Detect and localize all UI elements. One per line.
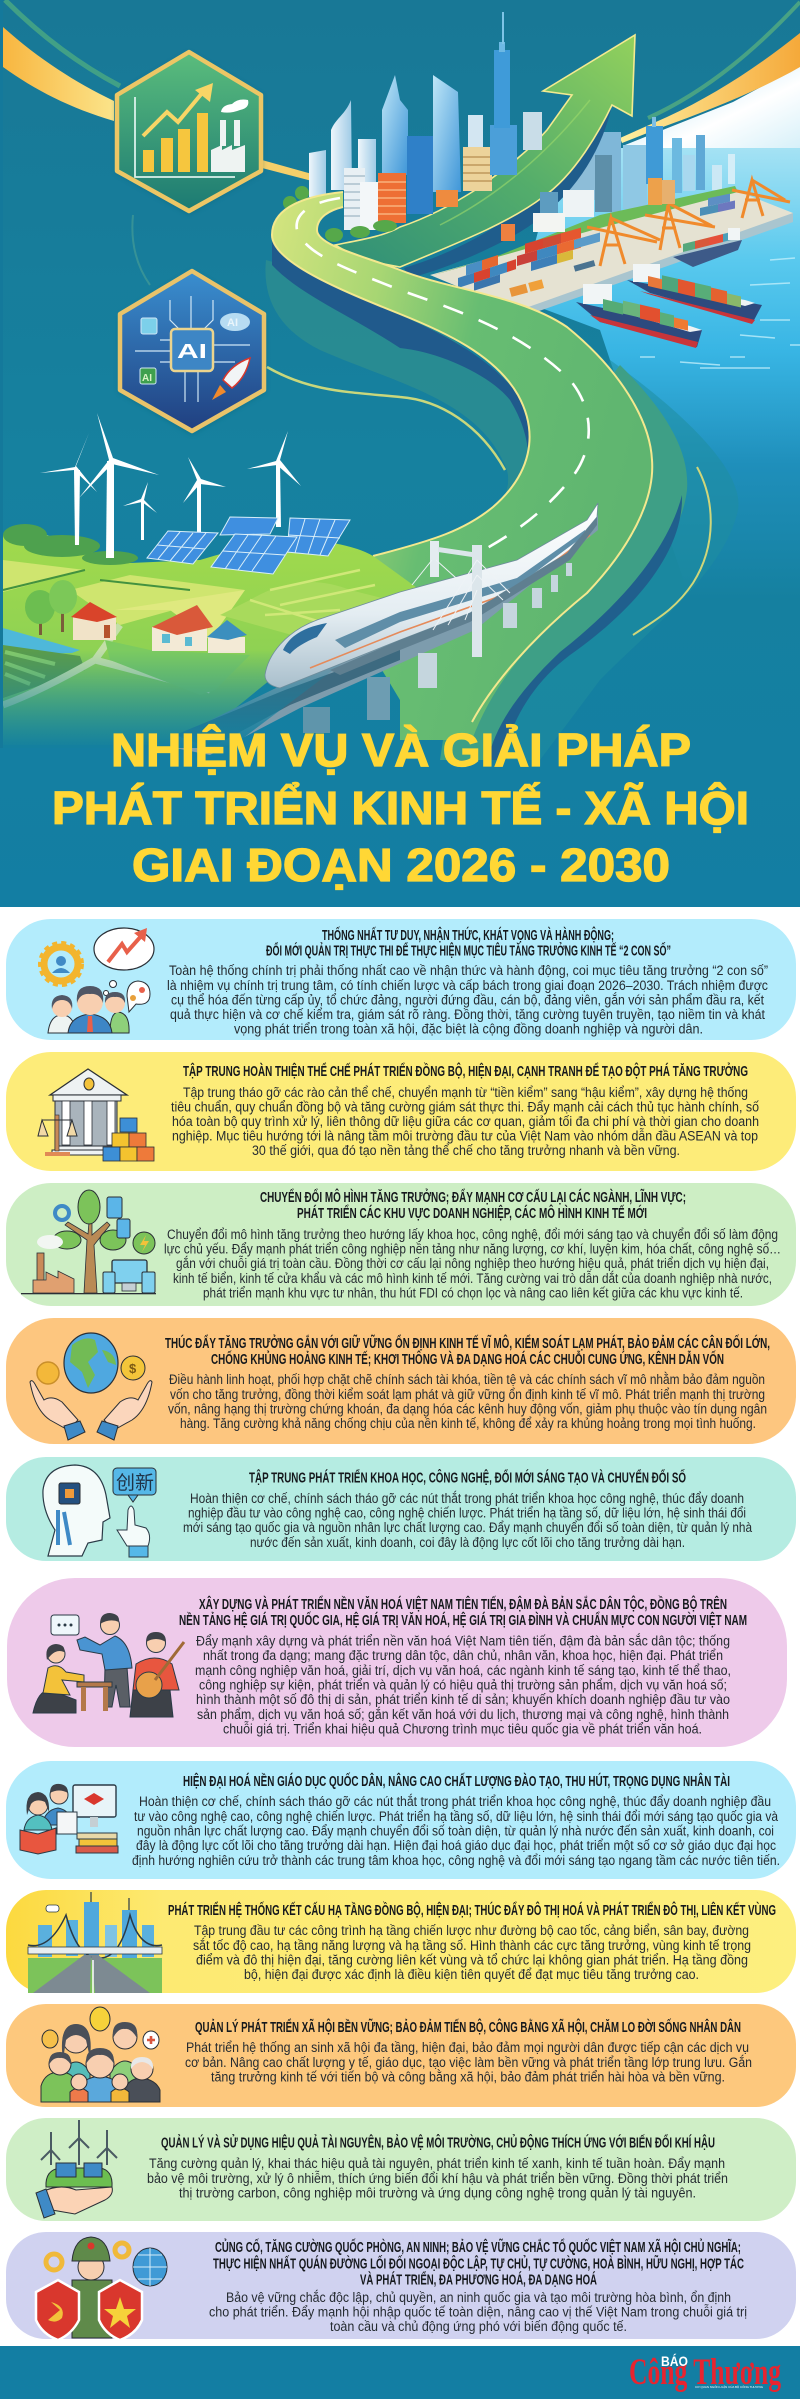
cargo ship far bbox=[673, 228, 742, 267]
body text: 30 thế giới, qua đó tạo nền tảng thể chế cho tăng trưởng nhanh và bền vững. bbox=[252, 1143, 680, 1159]
panel 10: environment bbox=[6, 2118, 796, 2221]
icon: hands holding globe and coins: $ bbox=[129, 1361, 137, 1376]
heading bbox=[213, 2238, 744, 2288]
icon: AI head with innovation bubble and robot hand: 创新 bbox=[116, 1468, 154, 1495]
body text bbox=[183, 1490, 752, 1551]
icon: court building, scale and blocks bbox=[38, 1069, 154, 1161]
heading bbox=[260, 1188, 686, 1222]
right gold ribbon bbox=[620, 2, 800, 143]
hero illustration bbox=[0, 0, 800, 760]
winding road bbox=[272, 192, 652, 740]
cargo ship middle bbox=[627, 264, 762, 324]
body text: bộ, hiện đại được xác định là điều kiện tiên quyết để đạt mục tiêu tăng trưởng cao. bbox=[244, 1967, 699, 1983]
icon: soldier with shields bbox=[36, 2237, 167, 2340]
body text: sản phẩm, dịch vụ văn hoá số; gắn kết văn hoá với du lịch, thương mại và công nghệ, hình thành bbox=[197, 1706, 729, 1723]
body text: tăng trưởng kinh tế với tiến bộ và công bằng xã hội, bảo đảm phát triển hài hòa và bền vững. bbox=[211, 2068, 725, 2086]
railway viaduct bbox=[160, 515, 598, 755]
high speed train bbox=[265, 503, 598, 688]
water highlights bbox=[640, 258, 800, 368]
icon: hand holding turbines and solar panels bbox=[36, 2120, 117, 2218]
icon: AI head with innovation bubble and robot hand bbox=[43, 1465, 156, 1557]
title: NHIỆM VỤ VÀ GIẢI PHÁP bbox=[111, 724, 691, 776]
body text: thị trường carbon, công nghiệp môi trường và ứng dụng công nghệ trong quản lý tài nguyên. bbox=[179, 2186, 696, 2202]
icon: green tree with factory and devices bbox=[21, 1190, 156, 1294]
body text bbox=[185, 2040, 752, 2086]
distant skyline bbox=[565, 117, 735, 212]
panel 8: infrastructure bbox=[6, 1890, 796, 1993]
wind turbines bbox=[40, 413, 301, 558]
panel 6: culture bbox=[7, 1578, 787, 1747]
house blue roof bbox=[207, 620, 247, 653]
icon: city highway and bridge bbox=[28, 1892, 162, 1993]
body text: vọng phát triển trong toàn xã hội, đặc biệt là cộng đồng doanh nghiệp và người dân. bbox=[234, 1022, 703, 1038]
port cranes bbox=[587, 180, 790, 266]
body text: toàn cầu và chủ động ứng phó với biến động quốc tế. bbox=[330, 2319, 627, 2335]
cargo ship front bbox=[576, 284, 702, 348]
icon: people with guitar bbox=[33, 1613, 184, 1717]
body text bbox=[167, 963, 768, 1038]
panel 11: defence and foreign policy bbox=[6, 2232, 796, 2340]
body text bbox=[147, 2156, 728, 2202]
hero illustration background bbox=[0, 0, 800, 907]
farmhouse red roof bbox=[71, 602, 117, 640]
solar panels bbox=[147, 517, 350, 574]
body text bbox=[209, 2289, 747, 2335]
body text: hình thành một số đô thị di sản, phát triển kinh tế di sản; khuyến khích doanh nghiệp đầu tư vào bbox=[196, 1692, 730, 1708]
panel 2: institutions bbox=[6, 1052, 796, 1171]
heading bbox=[179, 1595, 747, 1629]
teal layers under road, left side bbox=[265, 235, 540, 520]
title: PHÁT TRIỂN KINH TẾ - XÃ HỘI bbox=[52, 782, 749, 834]
body text: nhất trong đa dạng; mang đặc trưng dân tộc, dân chủ, nhân văn, khoa học, hiện đại. Phát triển bbox=[203, 1648, 723, 1664]
icon: AI chip hexagon: AI bbox=[177, 341, 207, 363]
body text: Bảo vệ vững chắc độc lập, chủ quyền, an ninh quốc gia và tạo môi trường hòa bình, ổn định bbox=[226, 2289, 731, 2306]
icon: hands holding globe and coins bbox=[30, 1333, 152, 1440]
body text: bảo vệ môi trường, xử lý ô nhiễm, thích ứng biến đổi khí hậu và phát triển bền vững. Đồng thời phát triển bbox=[147, 2170, 728, 2187]
body text: chuỗi giá trị. Triển khai hiệu quả Chương trình mục tiêu quốc gia về phát triển văn hoá. bbox=[223, 1720, 702, 1738]
icon: AI chip hexagon: AI bbox=[142, 373, 152, 384]
left gold ribbon bbox=[3, 0, 505, 470]
sea bbox=[520, 148, 800, 600]
teal layers under road, right side bbox=[440, 360, 739, 760]
panel 4: macro stability bbox=[6, 1318, 796, 1444]
icon: family group with emotions bbox=[41, 2007, 160, 2102]
bushes by city bbox=[283, 186, 397, 242]
panel 7: education bbox=[6, 1761, 796, 1879]
left city skyline bbox=[309, 12, 675, 241]
icon: growth chart hexagon bbox=[116, 52, 262, 214]
body text bbox=[132, 1793, 780, 1869]
icon: AI chip hexagon bbox=[119, 271, 265, 434]
panel 9: social development bbox=[6, 2004, 796, 2107]
heading: PHÁT TRIỂN CÁC KHU VỰC DOANH NGHIỆP, CÁC MÔ HÌNH KINH TẾ MỚI bbox=[297, 1204, 647, 1222]
icon: students, books and monitor bbox=[20, 1784, 118, 1854]
body text: Đẩy mạnh xây dựng và phát triển nền văn hoá Việt Nam tiên tiến, đậm đà bản sắc dân tộc; thống bbox=[196, 1632, 730, 1650]
icon: AI chip hexagon: AI bbox=[227, 317, 238, 329]
title bbox=[52, 724, 749, 891]
body text: nước đến sản xuất, kinh doanh, coi đây là động lực cốt lõi cho tăng trưởng dài hạn. bbox=[250, 1535, 685, 1551]
body text bbox=[168, 1371, 767, 1432]
left edge strip bbox=[0, 0, 3, 748]
body text: công nghiệp sự kiện, phát triển và quản lý có hiệu quả thị trường sản phẩm, dịch vụ văn hoá số; bbox=[199, 1678, 727, 1694]
cable stayed bridge pylons bbox=[412, 541, 510, 657]
trees bbox=[25, 580, 77, 635]
heading: VÀ PHÁT TRIỂN, ĐA PHƯƠNG HOÁ, ĐA DẠNG HOÁ bbox=[360, 2270, 597, 2288]
logo: Báo Công Thương: CƠ QUAN NGÔN LUẬN CỦA BỘ CÔNG THƯƠNG bbox=[695, 2384, 764, 2389]
fade at bottom of land bbox=[0, 650, 360, 748]
house orange roof bbox=[152, 605, 213, 651]
title: GIAI ĐOẠN 2026 - 2030 bbox=[132, 839, 670, 891]
heading: THỐNG NHẤT TƯ DUY, NHẬN THỨC, KHÁT VỌNG VÀ HÀNH ĐỘNG; bbox=[322, 926, 614, 944]
body text bbox=[164, 1227, 781, 1302]
countryside land bbox=[3, 524, 420, 745]
body text bbox=[193, 1923, 751, 1983]
heading bbox=[266, 926, 671, 960]
shipping containers bbox=[458, 193, 735, 297]
body text: cho phát triển. Đẩy mạnh hội nhập quốc tế toàn diện, nâng cao vị thế Việt Nam trong chuỗi giá trị bbox=[209, 2304, 747, 2320]
panel 5: science and technology bbox=[6, 1457, 796, 1561]
body text bbox=[195, 1632, 731, 1738]
body text bbox=[171, 1085, 759, 1159]
panel 3: growth model bbox=[6, 1183, 796, 1306]
body text: mạnh công nghiệp văn hoá, giải trí, dịch vụ văn hoá, các ngành kinh tế sáng tạo, kinh tế thể thao, bbox=[195, 1663, 731, 1679]
footer band bbox=[0, 2346, 800, 2399]
green growth arrow bbox=[335, 35, 635, 278]
port quay bbox=[430, 186, 793, 317]
panel 1: unified thinking bbox=[6, 919, 796, 1040]
heading bbox=[165, 1334, 770, 1368]
body text: Tăng cường quản lý, khai thác hiệu quả tài nguyên, phát triển kinh tế xanh, kinh tế tuần hoàn. Đẩy mạnh bbox=[149, 2156, 725, 2172]
icon: team with gear and growth bubble bbox=[40, 928, 154, 1033]
logo: Báo Công Thương: BÁO bbox=[661, 2353, 688, 2369]
sky at horizon bbox=[625, 66, 800, 150]
